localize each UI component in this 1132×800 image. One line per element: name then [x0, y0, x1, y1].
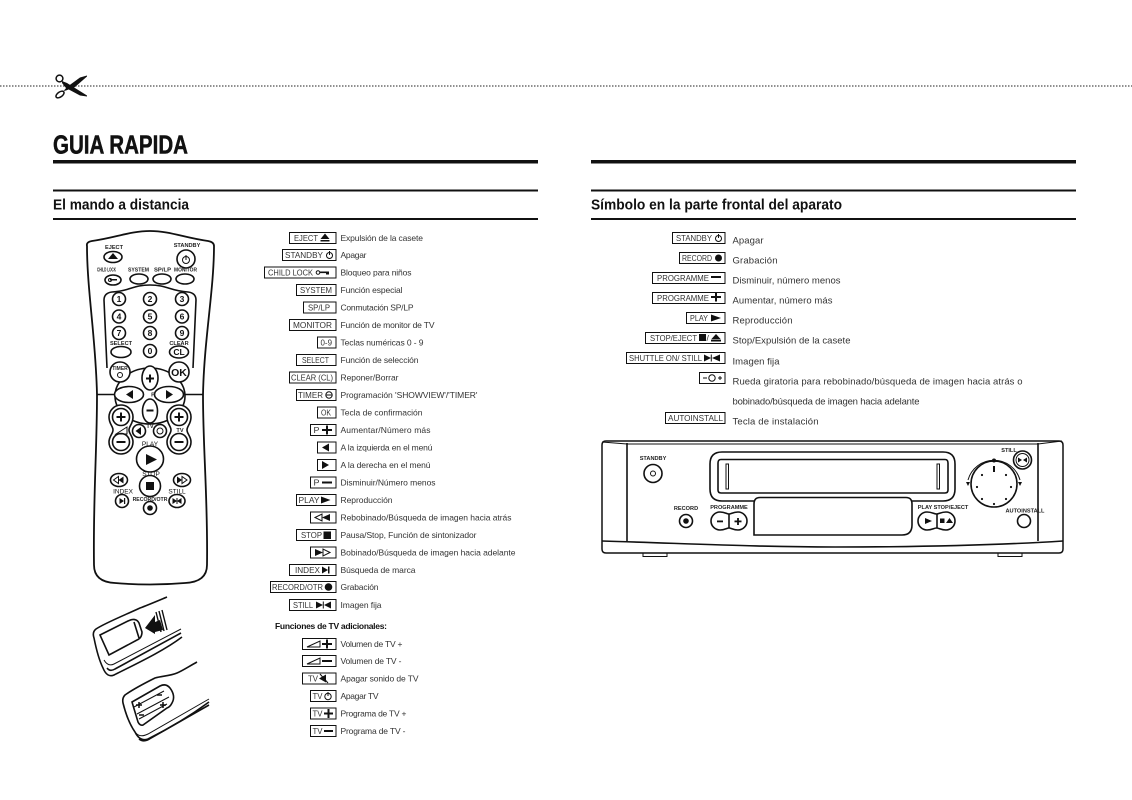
- VCR record button: [674, 506, 698, 528]
- row: programme minus: [652, 272, 841, 286]
- row: system: [296, 284, 403, 296]
- remote volume and TV keys: TV: [146, 424, 154, 430]
- row: programme plus: Aumentar, número más: [732, 296, 833, 306]
- row: play: Reproducción: [732, 316, 792, 326]
- row: play: [686, 312, 792, 326]
- row: shuttle still: [626, 352, 780, 368]
- row: TV mute: Apagar sonido de TV: [340, 674, 419, 684]
- remote buttons top: EJECT: [105, 245, 124, 251]
- row: shuttle dial: [700, 372, 1022, 408]
- VCR record button: RECORD: [674, 506, 698, 512]
- heading: additional TV functions: Funciones de TV adicionales:: [275, 621, 387, 631]
- remote number keys: 1: [117, 294, 122, 304]
- row: timer: [296, 390, 478, 400]
- remote buttons top: SP/LP: [154, 268, 171, 274]
- row: eject: EJECT: [294, 233, 318, 243]
- row: TV off: [310, 690, 379, 702]
- remote number keys: SELECT: [110, 341, 133, 347]
- row: sp/lp: Conmutación SP/LP: [340, 302, 414, 312]
- row: select: Función de selección: [340, 355, 419, 365]
- row: still: Imagen fija: [340, 600, 382, 610]
- row: system: SYSTEM: [300, 285, 332, 295]
- remote number keys: 6: [180, 312, 185, 322]
- remote volume and TV keys: TV: [176, 428, 184, 434]
- row: index: [290, 564, 416, 576]
- VCR standby button: STANDBY: [640, 456, 667, 462]
- row: TV programme up: [310, 708, 407, 719]
- row: stop: [296, 530, 477, 540]
- row: standby: [282, 250, 367, 260]
- row: shuttle dial: bobinado/búsqueda de imagen hacia adelante: [732, 396, 920, 408]
- row: system: Función especial: [340, 285, 403, 295]
- remote number keys: 9: [180, 328, 185, 338]
- VCR still button: [1001, 448, 1032, 469]
- row: record: Grabación: [340, 582, 379, 592]
- row: programme plus: PROGRAMME: [657, 293, 709, 303]
- remote number keys: CL: [173, 347, 185, 357]
- row: record: RECORD/OTR: [272, 582, 323, 592]
- battery compartment illustration: [123, 662, 209, 741]
- row: stop: Pausa/Stop, Función de sintonizador: [340, 530, 477, 540]
- row: stop eject: STOP/EJECT: [650, 333, 697, 343]
- remote buttons top: [97, 243, 201, 285]
- row: still: STILL: [293, 600, 313, 610]
- remote volume and TV keys: [109, 405, 191, 454]
- row: eject: Expulsión de la casete: [340, 233, 423, 243]
- row: p minus: Disminuir/Número menos: [340, 478, 436, 488]
- row: TV mute: [302, 673, 419, 684]
- VCR autoinstall button: [1006, 508, 1045, 528]
- row: autoinstall: Tecla de instalación: [732, 416, 818, 428]
- row: p minus: P: [314, 478, 320, 488]
- remote transport keys: PLAY: [142, 441, 159, 448]
- row: TV programme up: Programa de TV +: [340, 708, 407, 718]
- VCR shuttle dial: [966, 458, 1022, 507]
- row: TV programme down: Programa de TV -: [340, 726, 406, 736]
- icon: scissors: [55, 75, 87, 99]
- row: record: [680, 252, 778, 266]
- row: rewind: Rebobinado/Búsqueda de imagen hacia atrás: [340, 512, 512, 522]
- VCR autoinstall button: AUTOINSTALL: [1006, 508, 1045, 514]
- row: TV volume up: Volumen de TV +: [340, 639, 403, 649]
- row: monitor: MONITOR: [293, 320, 332, 330]
- row: play: [296, 494, 393, 506]
- row: ok: OK: [321, 408, 331, 418]
- row: child lock: Bloqueo para niños: [340, 268, 412, 278]
- remote buttons top: SYSTEM: [128, 268, 149, 274]
- left legend: remote functions: [264, 232, 516, 610]
- row: forward: Bobinado/Búsqueda de imagen hacia adelante: [340, 548, 516, 558]
- row: TV mute: TV: [308, 674, 318, 684]
- row: p plus: P: [314, 425, 320, 435]
- VCR still button: STILL: [1001, 448, 1017, 454]
- row: play: PLAY: [690, 313, 708, 323]
- row: shuttle still: SHUTTLE ON/ STILL: [629, 353, 702, 363]
- row: eject: [290, 232, 423, 244]
- row: number keys: Teclas numéricas 0 - 9: [340, 338, 424, 348]
- VCR programme buttons: PROGRAMME: [710, 505, 748, 511]
- left legend: TV functions: [302, 638, 419, 736]
- VCR play and stop/eject buttons: [918, 505, 969, 530]
- row: stop eject: [646, 332, 850, 346]
- remote transport keys: RECORD/OTR: [133, 497, 168, 503]
- row: record: [270, 582, 379, 592]
- remote navigation keys: [110, 362, 189, 423]
- row: TV off: TV: [312, 691, 323, 701]
- VCR tape slot: [710, 452, 955, 535]
- battery polarity marks: [136, 695, 166, 715]
- remote transport keys: INDEX: [113, 488, 134, 496]
- row: TV programme down: [310, 726, 406, 736]
- heading: right section: Símbolo en la parte frontal del aparato: [591, 196, 842, 214]
- remote navigation keys: TIMER: [112, 366, 128, 372]
- VCR play and stop/eject buttons: STOP/EJECT: [934, 505, 969, 511]
- remote number keys: [110, 292, 189, 358]
- row: programme minus: Disminuir, número menos: [732, 276, 841, 286]
- row: ok: Tecla de confirmación: [340, 408, 423, 418]
- row: timer: Programación 'SHOWVIEW'/'TIMER': [340, 390, 478, 400]
- remote control illustration: [87, 231, 214, 584]
- row: timer: TIMER: [298, 390, 323, 400]
- title: GUIA RAPIDA: [53, 132, 188, 160]
- row: p plus: [310, 424, 430, 436]
- remote buttons top: STANDBY: [174, 243, 201, 249]
- battery cover illustration: [93, 597, 182, 676]
- VCR body: [602, 441, 1063, 556]
- row: select: SELECT: [302, 355, 329, 365]
- row: TV programme down: TV: [312, 726, 323, 736]
- row: TV programme up: TV: [312, 708, 323, 718]
- remote number keys: 3: [180, 294, 185, 304]
- row: record: RECORD: [682, 253, 712, 263]
- row: right arrow: A la derecha en el menú: [340, 460, 431, 470]
- row: monitor: Función de monitor de TV: [340, 320, 435, 330]
- row: number keys: 0-9: [320, 338, 332, 348]
- row: autoinstall: [666, 412, 818, 428]
- row: TV off: Apagar TV: [340, 691, 379, 701]
- row: clear: Reponer/Borrar: [340, 372, 399, 382]
- row: sp/lp: [304, 302, 414, 313]
- row: left arrow: A la izquierda en el menú: [340, 442, 433, 452]
- row: play: Reproducción: [340, 495, 393, 505]
- remote buttons top: MONITOR: [174, 268, 197, 274]
- row: index: Búsqueda de marca: [340, 565, 416, 575]
- row: child lock: CHILD LOCK: [268, 268, 313, 278]
- row: sp/lp: SP/LP: [308, 302, 330, 312]
- remote navigation keys: OK: [171, 367, 187, 379]
- remote navigation keys: P: [151, 392, 155, 398]
- VCR standby button: [640, 456, 667, 482]
- remote number keys: 8: [148, 328, 153, 338]
- row: standby: STANDBY: [285, 250, 323, 260]
- VCR front panel illustration: [602, 441, 1063, 556]
- remote transport keys: STILL: [168, 488, 186, 496]
- remote number keys: 7: [117, 328, 122, 338]
- row: index: INDEX: [295, 565, 320, 575]
- row: still: [290, 600, 382, 610]
- row: autoinstall: AUTOINSTALL: [668, 413, 723, 423]
- row: play: PLAY: [298, 495, 320, 505]
- row: standby: Apagar: [732, 236, 764, 246]
- row: clear: CLEAR (CL): [291, 372, 333, 382]
- icon: press arrow: [145, 610, 167, 634]
- row: TV volume down: Volumen de TV -: [340, 656, 402, 666]
- remote transport keys: [110, 441, 190, 514]
- remote number keys: 5: [148, 312, 153, 322]
- remote number keys: 4: [117, 312, 122, 322]
- heading: left section: El mando a distancia: [53, 196, 190, 214]
- right legend: front panel symbols: [626, 232, 1022, 428]
- row: clear: [290, 372, 399, 383]
- remote buttons top: CHILD LOCK: [97, 268, 116, 274]
- row: stop eject: /: [706, 333, 710, 343]
- row: record: Grabación: [732, 256, 778, 266]
- row: programme minus: PROGRAMME: [657, 273, 709, 283]
- remote transport keys: STOP: [142, 471, 160, 478]
- VCR programme buttons: [710, 505, 748, 530]
- row: stop: STOP: [301, 530, 322, 540]
- row: programme plus: [652, 292, 833, 306]
- row: standby: [672, 232, 764, 246]
- remote number keys: 2: [148, 294, 153, 304]
- row: shuttle dial: Rueda giratoria para rebobinado/búsqueda de imagen hacia atrás o: [732, 376, 1022, 388]
- row: child lock: [264, 267, 412, 278]
- row: standby: STANDBY: [676, 233, 712, 243]
- row: p plus: Aumentar/Número más: [340, 425, 430, 435]
- row: standby: Apagar: [340, 250, 367, 260]
- row: stop eject: Stop/Expulsión de la casete: [732, 336, 850, 346]
- remote number keys: 0: [148, 346, 153, 356]
- row: select: [296, 354, 419, 366]
- row: monitor: [290, 320, 435, 330]
- row: shuttle still: Imagen fija: [732, 356, 780, 368]
- VCR play and stop/eject buttons: PLAY: [918, 505, 932, 511]
- remote number keys: CLEAR: [169, 341, 189, 347]
- row: p minus: [310, 477, 436, 488]
